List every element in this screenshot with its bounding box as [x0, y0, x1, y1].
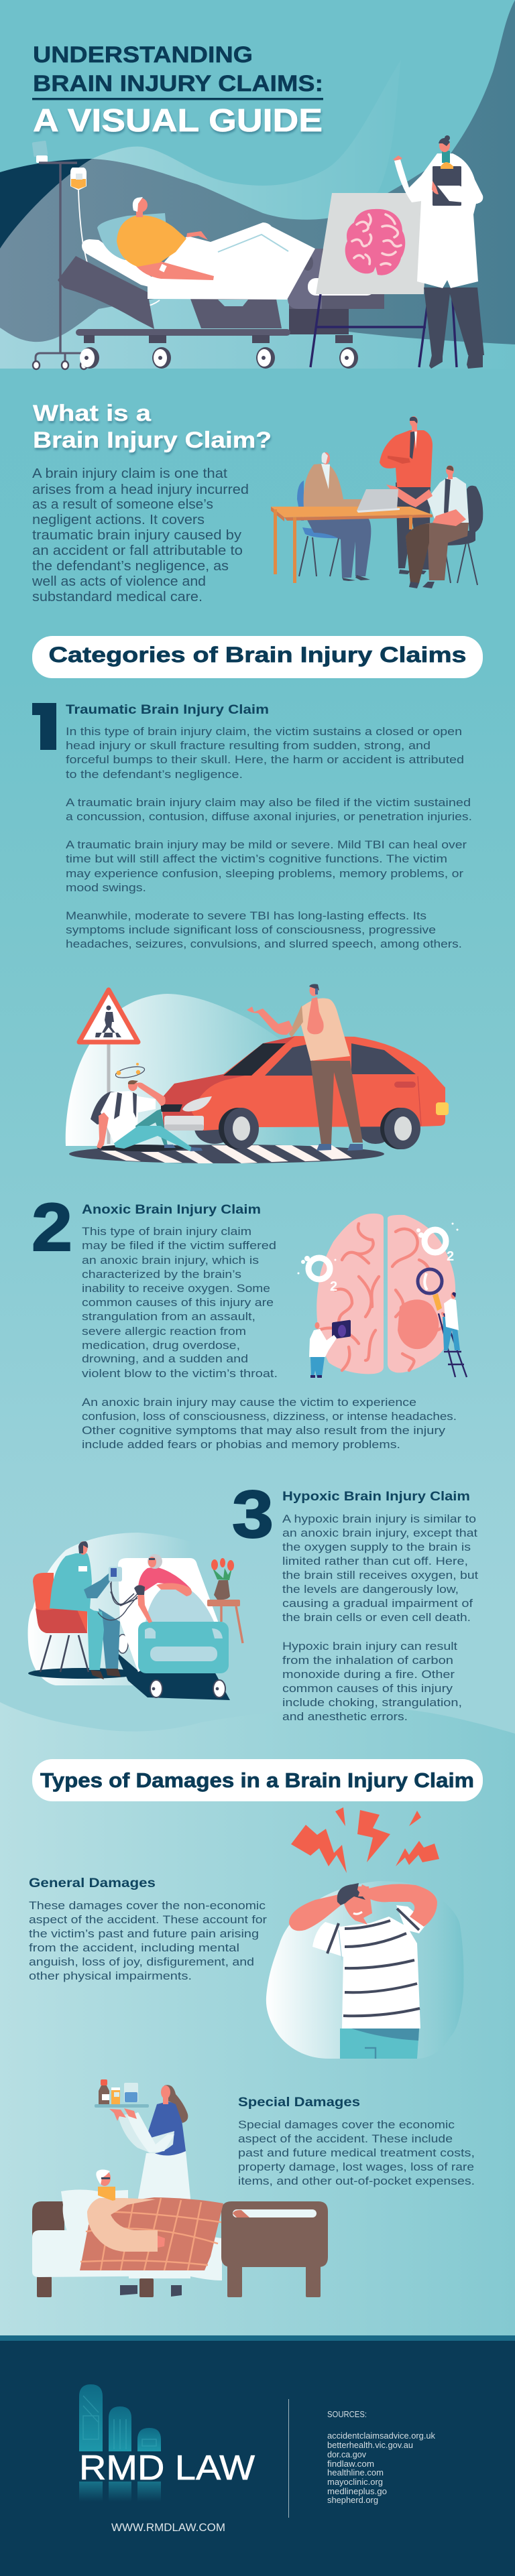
- text block: may experience confusion, sleeping problems, memory problems, or: [66, 867, 463, 880]
- icon: patient in bed: [97, 197, 315, 300]
- text block: [29, 1899, 267, 1982]
- text block: from the accident, including mental: [29, 1941, 239, 1954]
- text block: a concussion, contusion, diffuse axonal injuries, or penetration injuries.: [66, 810, 472, 823]
- text block: medication, drug overdose,: [82, 1339, 240, 1352]
- logo: RMD LAW: RMD LAW: [79, 2449, 255, 2488]
- text block: monoxide during a fire. Other: [282, 1668, 455, 1681]
- text block: the victim’s past and future pain arising: [29, 1927, 259, 1940]
- icon: pain bolts: [291, 1807, 439, 1873]
- text block: anguish, loss of joy, disfigurement, and: [29, 1955, 254, 1968]
- icon: hospital bed: [117, 1558, 229, 1697]
- sources list: SOURCES:: [327, 2410, 367, 2419]
- icon: oxygen symbols: 2: [330, 1279, 337, 1294]
- sources list: healthline.com: [327, 2468, 384, 2477]
- logo: RMD LAW: [79, 2384, 255, 2502]
- icon: magnifier: [418, 1269, 442, 1311]
- text block: time but will still affect the victim’s cognitive functions. The victim: [66, 852, 447, 865]
- panel: general damages: [29, 1807, 463, 2059]
- sources list: accidentclaimsadvice.org.uk: [327, 2431, 436, 2441]
- text block: items, and other out-of-pocket expenses.: [238, 2175, 475, 2187]
- text block: the brain cells or even cell death.: [282, 1611, 471, 1624]
- sources list: shepherd.org: [327, 2496, 378, 2505]
- sources list: [327, 2410, 436, 2505]
- heading: types of damages in a brain injury claim: [32, 1759, 483, 1801]
- panel: traumatic brain injury claim: [13, 688, 472, 1163]
- text block: mood swings.: [66, 881, 146, 894]
- heading: categories of brain injury claims: Categories of Brain Injury Claims: [48, 643, 467, 667]
- icon: pedestrian sign: [79, 990, 138, 1144]
- character: driver on phone: [247, 984, 363, 1151]
- text block: negligent actions. It covers: [32, 512, 205, 527]
- text block: an anoxic brain injury, which is: [82, 1254, 259, 1267]
- floor shadow: [28, 1651, 230, 1700]
- logo reflection: [79, 2482, 161, 2502]
- text block: severe allergic reaction from: [82, 1325, 246, 1338]
- character: man: [289, 1883, 437, 2059]
- panel: what is a brain injury claim: [32, 401, 483, 604]
- illustration: meeting at a table: [271, 416, 483, 588]
- title: UNDERSTANDING: [33, 42, 253, 68]
- text block: characterized by the brain’s: [82, 1268, 241, 1281]
- text block: include choking, strangulation,: [282, 1696, 462, 1709]
- icon: oxygen symbols: 2: [447, 1249, 454, 1264]
- text block: traumatic brain injury caused by: [32, 527, 242, 543]
- character: nurse: [95, 2085, 190, 2297]
- text block: In this type of brain injury claim, the victim sustains a closed or open: [66, 725, 462, 738]
- panel: anoxic brain injury claim: [32, 1190, 467, 1451]
- sources list: dor.ca.gov: [327, 2450, 367, 2459]
- text block: A brain injury claim is one that: [32, 466, 227, 481]
- text block: common causes of this injury are: [82, 1296, 274, 1309]
- character: nurse: [50, 1541, 137, 1679]
- panel: hypoxic brain injury claim: [28, 1477, 478, 1723]
- text block: These damages cover the non-economic: [29, 1899, 266, 1912]
- character: patient: [111, 1554, 192, 1623]
- heading: [33, 401, 272, 453]
- illustration: man with headache: [266, 1807, 463, 2059]
- number 2: 2: [32, 1190, 72, 1265]
- character: doctor with clipboard: [393, 135, 484, 369]
- text block: [238, 2118, 475, 2187]
- icon: side table with flowers: [207, 1558, 243, 1643]
- illustration: car accident at crossing: [66, 984, 449, 1163]
- sources list: medlineplus.go: [327, 2487, 387, 2496]
- text block: common causes of this injury: [282, 1682, 453, 1695]
- text block: confusion, loss of consciousness, dizziness, or intense headaches.: [82, 1410, 457, 1423]
- text block: Other cognitive symptoms that may also result from the injury: [82, 1424, 446, 1437]
- text block: [82, 1225, 457, 1451]
- text block: arises from a head injury incurred: [32, 482, 249, 497]
- icon: oxygen symbols: [298, 1222, 459, 1294]
- character: doctor with tablet: [309, 1319, 351, 1378]
- icon: car: [161, 1036, 449, 1149]
- icon: chair: [33, 1573, 89, 1672]
- sources list: findlaw.com: [327, 2459, 374, 2469]
- text block: A traumatic brain injury claim may also be filed if the victim sustained: [66, 796, 471, 809]
- icon: medicine on tray: [99, 2079, 138, 2104]
- text block: property damage, lost wages, loss of rare: [238, 2161, 474, 2173]
- text block: the oxygen supply to the brain is: [282, 1541, 471, 1553]
- heading: Brain Injury Claim?: [33, 428, 272, 453]
- text block: head injury or skull fracture resulting from sudden, strong, and: [66, 739, 431, 752]
- illustration: brain with doctors: [298, 1214, 467, 1378]
- text block: aspect of the accident. These include: [238, 2132, 453, 2145]
- hero background waves: [0, 0, 515, 369]
- text block: an anoxic brain injury, except that: [282, 1527, 477, 1539]
- text block: aspect of the accident. These account for: [29, 1913, 267, 1926]
- title: [32, 42, 323, 139]
- character: patient under blanket: [80, 2170, 223, 2270]
- text block: inability to receive oxygen. Some: [82, 1282, 270, 1295]
- text block: [66, 725, 472, 950]
- heading: categories of brain injury claims: [32, 636, 483, 678]
- text block: violent blow to the victim’s throat.: [82, 1367, 278, 1380]
- subheading: General Damages: [29, 1876, 156, 1890]
- character: doctor on ladder: [439, 1292, 467, 1377]
- illustration: hospital bed scene: [32, 135, 484, 369]
- text block: the defendant’s negligence, as: [32, 558, 229, 574]
- subheading: Hypoxic Brain Injury Claim: [282, 1490, 470, 1504]
- chart board with brain: [310, 193, 457, 367]
- text block: past and future medical treatment costs,: [238, 2146, 475, 2159]
- sources list: mayoclinic.org: [327, 2477, 383, 2487]
- text block: A traumatic brain injury may be mild or severe. Mild TBI can heal over: [66, 838, 467, 851]
- text block: an accident or fall attributable to: [32, 543, 243, 558]
- text block: Meanwhile, moderate to severe TBI has long-lasting effects. Its: [66, 909, 426, 922]
- subheading: Special Damages: [238, 2096, 360, 2110]
- character: injured pedestrian: [91, 1063, 203, 1151]
- title: BRAIN INJURY CLAIMS:: [33, 71, 323, 96]
- text block: forceful bumps to their skull. Here, the harm or accident is attributed: [66, 753, 464, 766]
- panel: special damages: [32, 2079, 475, 2297]
- icon: logo arches: [79, 2384, 161, 2451]
- text block: drowning, and a sudden and: [82, 1352, 248, 1365]
- subheading: Traumatic Brain Injury Claim: [66, 703, 269, 717]
- website: WWW.RMDLAW.COM: [111, 2521, 225, 2534]
- text block: [282, 1512, 478, 1723]
- icon: brain: [345, 209, 405, 275]
- road crossing: [69, 1145, 384, 1163]
- text block: other physical impairments.: [29, 1970, 192, 1982]
- subheading: Anoxic Brain Injury Claim: [82, 1203, 261, 1217]
- text block: headaches, seizures, convulsions, and slurred speech, among others.: [66, 938, 462, 950]
- text block: strangulation from an assault,: [82, 1310, 255, 1323]
- text block: substandard medical care.: [32, 589, 203, 604]
- illustration: nurse checking patient blood pressure: [28, 1533, 246, 1700]
- text block: as a result of someone else’s: [32, 497, 213, 512]
- illustration: nurse bringing medicine to patient: [32, 2079, 328, 2297]
- footer: [0, 2335, 515, 2576]
- text block: limited rather than cut off. Here,: [282, 1555, 468, 1567]
- text block: may be filed if the victim suffered: [82, 1239, 276, 1252]
- icon: hospital bed: [58, 239, 384, 369]
- text block: A hypoxic brain injury is similar to: [282, 1512, 476, 1525]
- number 1: 1: [13, 688, 74, 765]
- text block: from the inhalation of carbon: [282, 1654, 453, 1667]
- text block: An anoxic brain injury may cause the victim to experience: [82, 1396, 416, 1409]
- icon: bed: [32, 2190, 328, 2297]
- title: A VISUAL GUIDE: [33, 103, 323, 139]
- text block: the levels are dangerously low,: [282, 1583, 459, 1596]
- icon: IV stand: [32, 141, 160, 369]
- heading: types of damages in a brain injury claim: Types of Damages in a Brain Injury Claim: [40, 1768, 474, 1792]
- text block: symptoms include significant loss of consciousness, progressive: [66, 923, 436, 936]
- text block: the brain still receives oxygen, but: [282, 1569, 478, 1582]
- text block: [32, 466, 249, 604]
- text block: Special damages cover the economic: [238, 2118, 455, 2131]
- number 3: 3: [232, 1477, 274, 1552]
- heading: What is a: [33, 401, 152, 426]
- text block: include added fears or phobias and memory problems.: [82, 1438, 400, 1451]
- text block: and anesthetic errors.: [282, 1710, 408, 1723]
- text block: causing a gradual impairment of: [282, 1597, 473, 1610]
- sources list: betterhealth.vic.gov.au: [327, 2441, 413, 2450]
- text block: This type of brain injury claim: [82, 1225, 251, 1238]
- text block: well as acts of violence and: [32, 574, 206, 589]
- text block: Hypoxic brain injury can result: [282, 1640, 457, 1653]
- text block: to the defendant’s negligence.: [66, 768, 243, 781]
